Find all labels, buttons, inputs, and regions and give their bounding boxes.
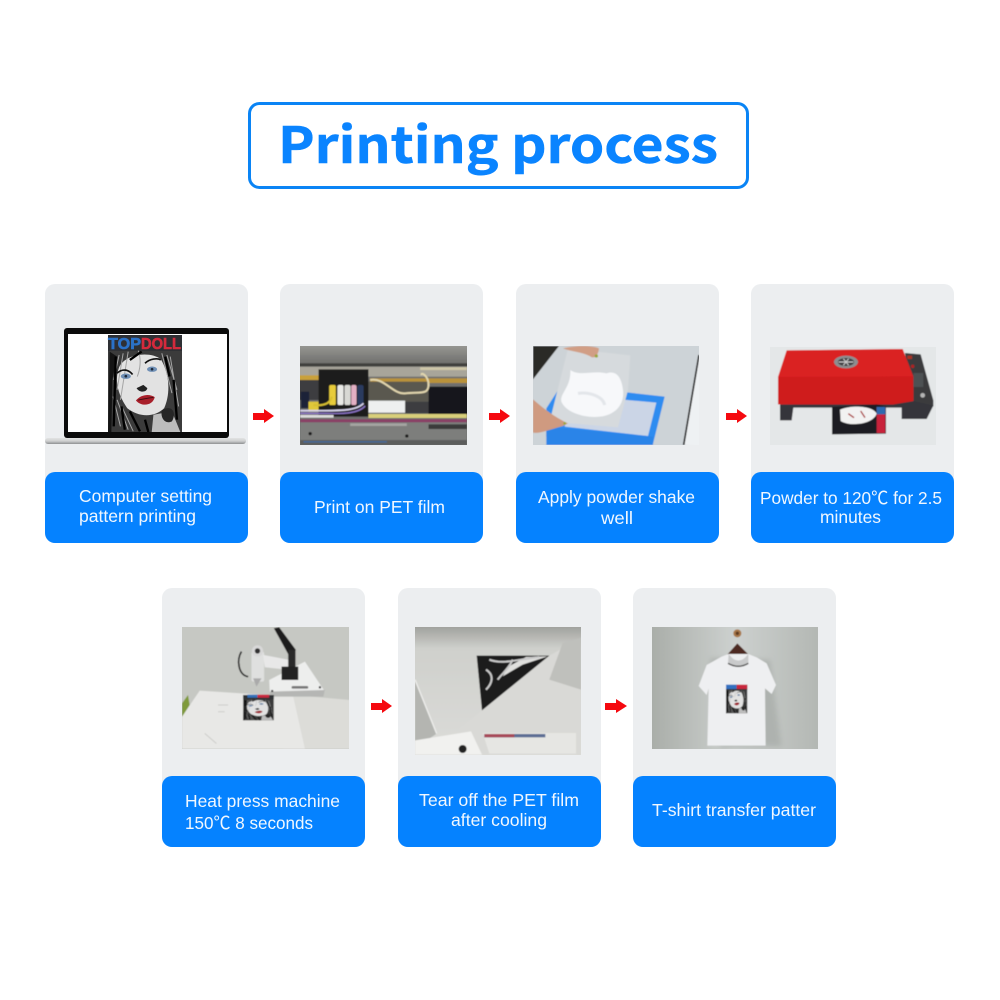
panel: step 3 apply powder (516, 284, 719, 543)
caption: step 6: after cooling (451, 810, 547, 830)
caption: step 2 (280, 472, 483, 543)
caption: step 3: Apply powder shake (538, 487, 695, 507)
image: laptop showing portrait: DOLL (141, 336, 181, 353)
caption: step 3: well (600, 508, 633, 528)
caption: step 5: Heat press machine (185, 791, 340, 811)
panel: step 2 print on PET film (280, 284, 483, 543)
panel: step 4 powder curing (751, 284, 954, 543)
caption: step 4 (751, 472, 954, 543)
panel: step 7 finished t-shirt (633, 588, 836, 847)
arrow: step 1 to 2 (253, 409, 274, 423)
image: film being peeled (415, 627, 581, 755)
image: laptop showing portrait (45, 328, 246, 444)
caption: step 4: Powder to 120℃ for 2.5 (760, 488, 942, 508)
panel: step 5 heat press (162, 588, 365, 847)
image: red curing oven (777, 348, 934, 436)
caption: step 7 (633, 776, 836, 847)
panel: step 6 tear off film (398, 588, 601, 847)
caption: step 5 (162, 776, 365, 847)
caption: step 5: 150℃ 8 seconds (185, 813, 313, 833)
arrow: step 3 to 4 (726, 409, 747, 423)
caption: step 1 (45, 472, 248, 543)
image: printer carriage (300, 346, 467, 445)
caption: step 3 (516, 472, 719, 543)
image: film over powder tray (533, 346, 699, 445)
arrow: step 2 to 3 (489, 409, 510, 423)
title: Printing process (250, 104, 748, 188)
image: laptop showing portrait: TOP (108, 336, 141, 353)
caption: step 1: pattern printing (79, 506, 196, 526)
caption: step 1: Computer setting (79, 486, 212, 506)
caption: step 6: Tear off the PET film (419, 790, 579, 810)
caption: step 2: Print on PET film (314, 497, 445, 517)
arrow: step 5 to 6 (371, 699, 392, 713)
panel: step 1 computer setting (45, 284, 248, 543)
caption: step 7: T-shirt transfer patter (652, 800, 816, 820)
image: t-shirt on hanger (652, 627, 818, 749)
caption: step 4: minutes (820, 507, 881, 527)
title: Printing process: Printing process (278, 106, 718, 178)
image: heat press machine (182, 627, 349, 749)
caption: step 6 (398, 776, 601, 847)
arrow: step 6 to 7 (605, 699, 627, 713)
